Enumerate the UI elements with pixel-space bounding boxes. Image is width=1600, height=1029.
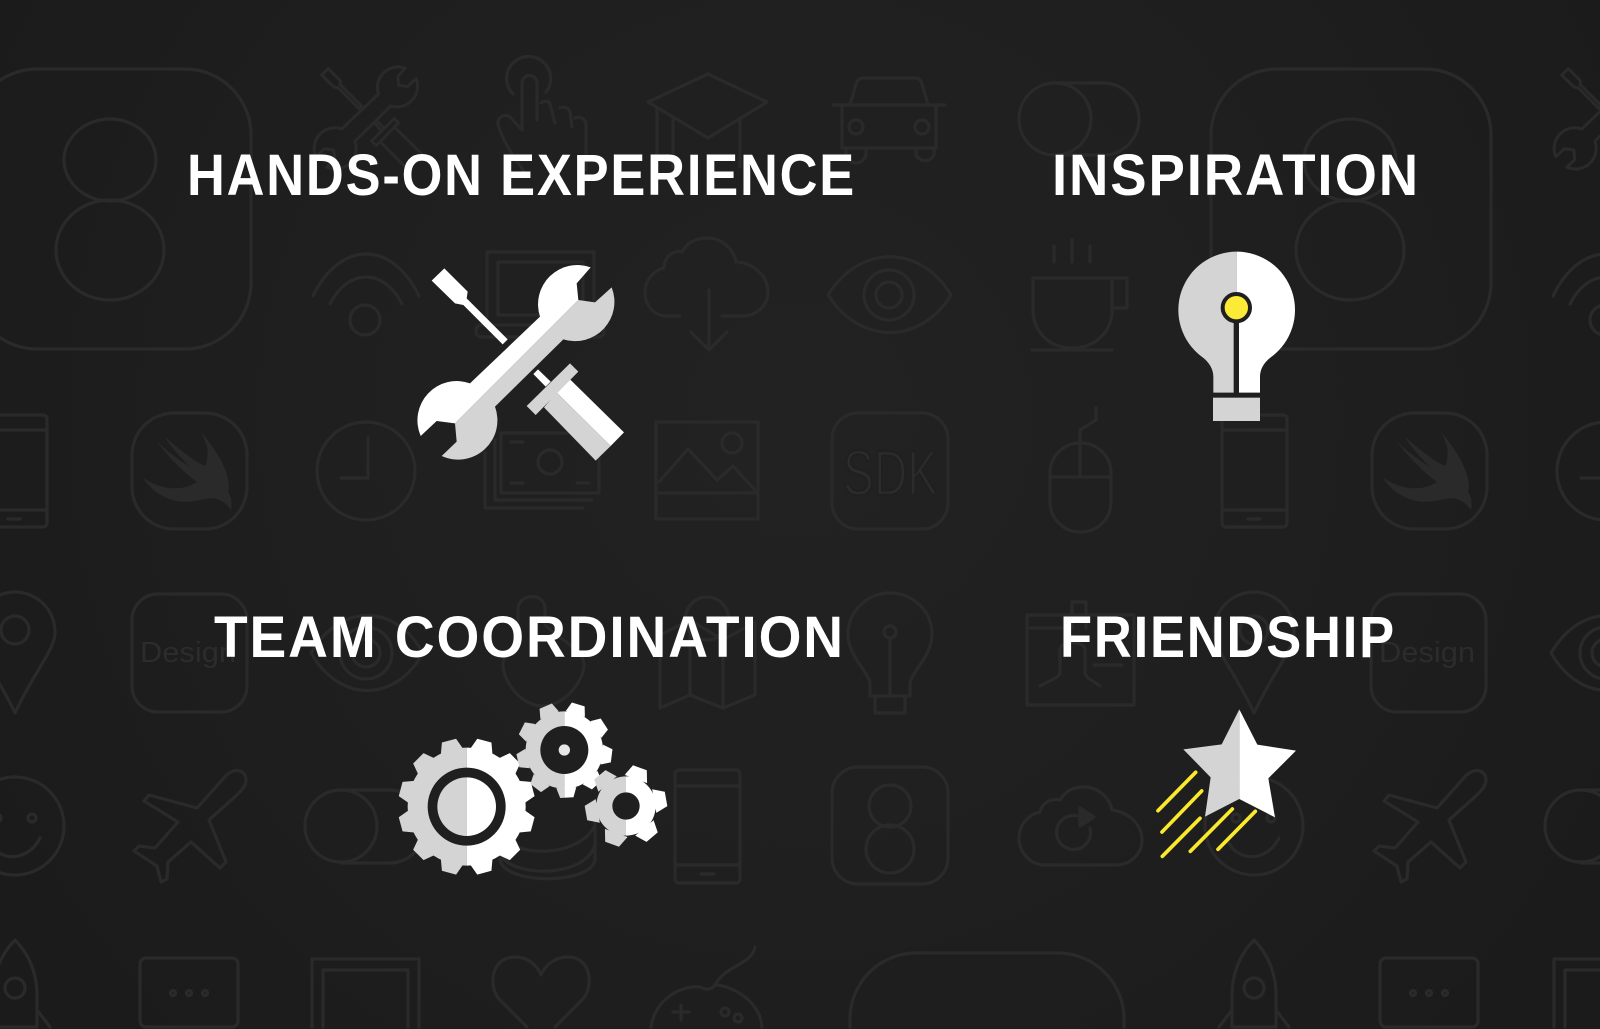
icon: rocket repeat xyxy=(1219,940,1289,1027)
icon: design tile xyxy=(132,594,247,712)
yellow light xyxy=(1223,294,1250,321)
icon: contact card xyxy=(1027,602,1134,705)
icon: vase shape xyxy=(503,597,584,706)
icon: wrench and screwdriver xyxy=(417,265,624,461)
icon: big 8 app tile repeat xyxy=(1211,69,1491,349)
filament xyxy=(1234,322,1239,393)
icon: eye small xyxy=(311,616,423,690)
icon: mouse xyxy=(1050,408,1111,532)
icon: graduation cap xyxy=(648,74,767,167)
screwdriver handle shaded side xyxy=(544,393,611,461)
icon: car xyxy=(833,78,945,163)
icon: chat bubble xyxy=(140,958,238,1027)
icon: smiley repeat xyxy=(1205,777,1303,875)
heading: inspiration: INSPIRATION xyxy=(1052,143,1420,208)
icon: design tile repeat xyxy=(1371,594,1486,712)
icon: eye xyxy=(828,257,951,332)
icon: map xyxy=(660,597,755,708)
screwdriver blade xyxy=(432,268,508,344)
icon: big rounded tile bottom xyxy=(850,953,1124,1027)
icon: chat repeat xyxy=(1380,958,1478,1027)
icon: light bulb xyxy=(1178,252,1295,421)
yellow trails xyxy=(1158,772,1255,856)
bulb light half xyxy=(1237,252,1295,393)
icon: wifi xyxy=(313,254,419,335)
icon: tools outline repeat xyxy=(1554,67,1600,170)
icon: gears xyxy=(398,701,668,876)
heading: friendship: FRIENDSHIP xyxy=(1060,605,1396,670)
icon: smiley xyxy=(0,777,64,875)
wrench light side xyxy=(417,265,591,436)
icon: heart xyxy=(493,957,589,1027)
icon: toggle xyxy=(1019,83,1139,155)
icon: cloud sync xyxy=(1019,787,1142,865)
icon: swift xyxy=(132,413,247,529)
icon: phone xyxy=(0,415,47,527)
icon: toggle repeat xyxy=(1545,790,1600,863)
star light half xyxy=(1239,709,1296,817)
icon: toggle lower xyxy=(305,790,426,863)
icon: swift repeat xyxy=(1372,413,1487,529)
heading: hands-on experience: HANDS-ON EXPERIENCE xyxy=(187,143,856,208)
icon: tools outline xyxy=(314,67,423,170)
screwdriver crossguard xyxy=(527,363,578,415)
icon: tablet xyxy=(312,959,419,1027)
icon: plane repeat xyxy=(1374,771,1486,882)
icon: cloud download xyxy=(645,238,768,350)
icon: clock xyxy=(317,422,415,520)
icon: big 8 app tile xyxy=(0,69,251,349)
bulb base xyxy=(1213,398,1260,421)
icon: map pin repeat xyxy=(1214,592,1294,713)
icon: tablet repeat xyxy=(1554,959,1600,1027)
icon: rocket xyxy=(0,940,50,1027)
icon: light bulb outline xyxy=(848,593,932,713)
icon: 8 tile xyxy=(832,767,948,884)
medium gear xyxy=(516,701,613,798)
icon: eye small repeat xyxy=(1551,616,1600,690)
icon: plane xyxy=(134,771,246,882)
icon: banknote xyxy=(485,433,599,508)
icon: phone lower xyxy=(675,770,740,883)
large gear xyxy=(398,738,536,876)
star shaded half xyxy=(1183,709,1239,817)
small gear xyxy=(584,764,668,848)
icon: shooting star xyxy=(1158,709,1296,856)
icon: database stack xyxy=(500,800,595,879)
screwdriver handle light side xyxy=(557,379,624,446)
icon: SDK tile xyxy=(832,413,948,529)
heading: team coordination: TEAM COORDINATION xyxy=(214,605,845,670)
icon: SDK tile: SDK xyxy=(843,437,938,509)
bulb shaded half xyxy=(1178,252,1237,393)
icon: map pin xyxy=(0,592,55,713)
icon: monitor xyxy=(476,252,604,337)
icon: phone repeat xyxy=(1222,415,1287,527)
icon: hand pointer xyxy=(498,57,586,175)
screwdriver shaft end xyxy=(533,369,551,387)
wrench shaded side xyxy=(442,287,614,460)
icon: wifi repeat xyxy=(1553,254,1600,335)
icon: clock repeat xyxy=(1557,422,1600,520)
icon: image xyxy=(656,422,758,519)
icon: gamepad xyxy=(651,947,762,1027)
icon: coffee cup xyxy=(1032,240,1127,350)
